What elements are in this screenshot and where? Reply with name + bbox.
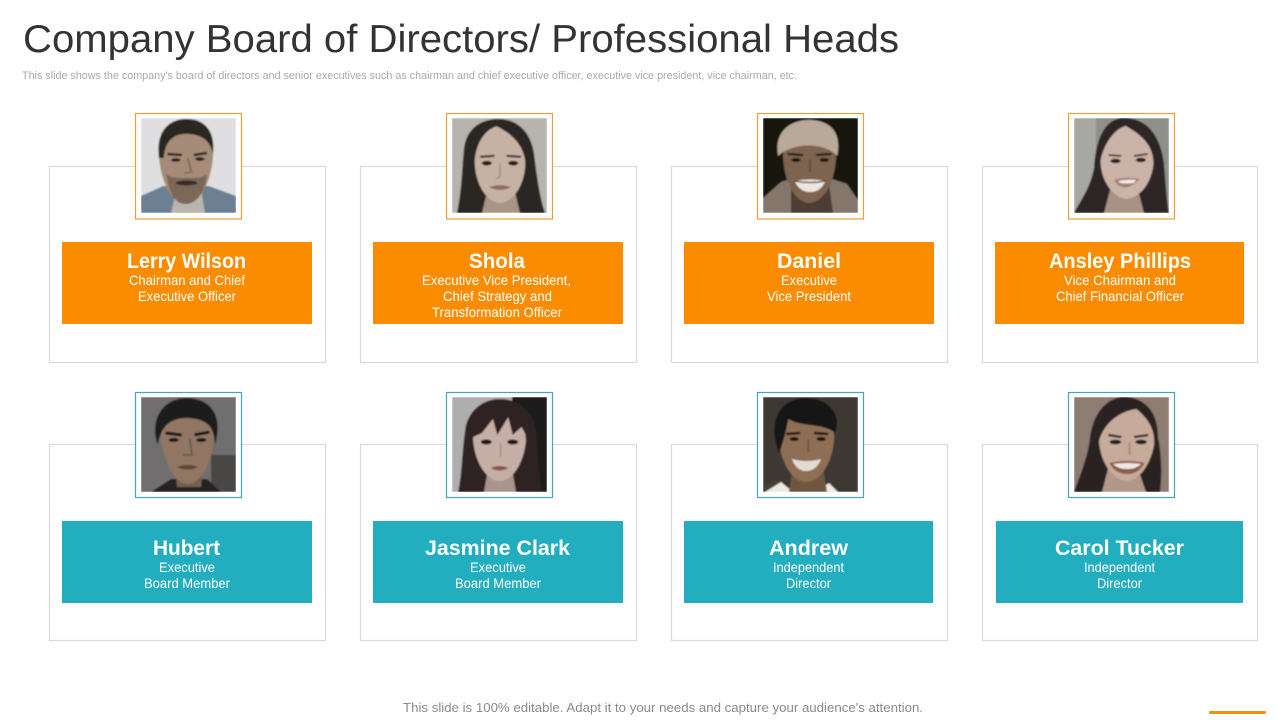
name plate: Carol Tucker [996,521,1243,603]
name plate: Lerry Wilson: Executive Officer [138,288,236,304]
name plate: Jasmine Clark: Executive [470,559,526,575]
portrait: Lerry Wilson [141,118,236,213]
footer note: This slide is 100% editable. Adapt it to your needs and capture your audience's attention. [403,701,923,715]
name plate: Shola [373,242,623,324]
photo frame: Daniel [758,114,864,219]
subtitle: This slide shows the company's board of directors and senior executives such as chairman and chief executive officer, executive vice president, vice chairman, etc. [22,70,797,82]
name plate: Shola: Chief Strategy and [443,288,552,304]
photo frame: Ansley Phillips [1068,114,1174,219]
name plate: Lerry Wilson: Lerry Wilson [127,250,246,273]
name plate: Hubert: Executive [159,559,215,575]
name plate: Carol Tucker: Carol Tucker [1055,537,1184,560]
panel: Lerry Wilson [50,114,326,362]
panel: Hubert [50,392,326,640]
name plate: Andrew [684,521,933,603]
photo frame: Andrew [758,392,864,498]
name plate: Andrew: Independent [773,559,844,575]
panel: Shola [360,114,636,362]
photo frame: Lerry Wilson [136,114,242,219]
name plate: Shola: Executive Vice President, [422,272,571,288]
photo frame: Carol Tucker [1068,392,1174,498]
name plate: Daniel: Executive [781,272,837,288]
name plate: Shola: Shola [469,250,525,273]
accent bar [1209,711,1266,714]
portrait: Hubert [141,397,236,492]
name plate: Hubert [62,521,312,603]
name plate: Jasmine Clark [373,521,623,603]
portrait: Daniel [763,118,858,213]
name plate: Ansley Phillips: Vice Chairman and [1064,272,1176,288]
portrait: Ansley Phillips [1074,118,1169,213]
name plate: Hubert: Hubert [153,537,220,560]
photo frame: Jasmine Clark [446,392,552,498]
panel: Ansley Phillips [982,114,1258,362]
name plate: Ansley Phillips: Ansley Phillips [1049,250,1191,273]
name plate: Andrew: Andrew [769,537,849,560]
portrait: Andrew [763,397,858,492]
name plate: Ansley Phillips [995,242,1244,324]
name plate: Lerry Wilson [62,242,312,324]
name plate: Hubert: Board Member [144,575,230,591]
name plate: Ansley Phillips: Chief Financial Officer [1056,288,1184,304]
name plate: Daniel: Vice President [767,288,851,304]
name plate: Daniel [684,242,934,324]
name plate: Daniel: Daniel [777,250,841,273]
portrait: Jasmine Clark [452,397,547,492]
name plate: Shola: Transformation Officer [432,304,562,320]
photo frame: Hubert [136,392,242,498]
panel: Daniel [672,114,948,362]
name plate: Jasmine Clark: Board Member [455,575,541,591]
name plate: Lerry Wilson: Chairman and Chief [129,272,245,288]
photo frame: Shola [446,114,552,219]
name plate: Andrew: Director [786,575,831,591]
panel: Andrew [672,392,948,640]
title: Company Board of Directors/ Professional Heads [23,18,899,61]
portrait: Shola [452,118,547,213]
panel: Jasmine Clark [360,392,636,640]
name plate: Carol Tucker: Independent [1084,559,1155,575]
name plate: Jasmine Clark: Jasmine Clark [425,537,570,560]
name plate: Carol Tucker: Director [1097,575,1142,591]
panel: Carol Tucker [982,392,1258,640]
portrait: Carol Tucker [1074,397,1169,492]
